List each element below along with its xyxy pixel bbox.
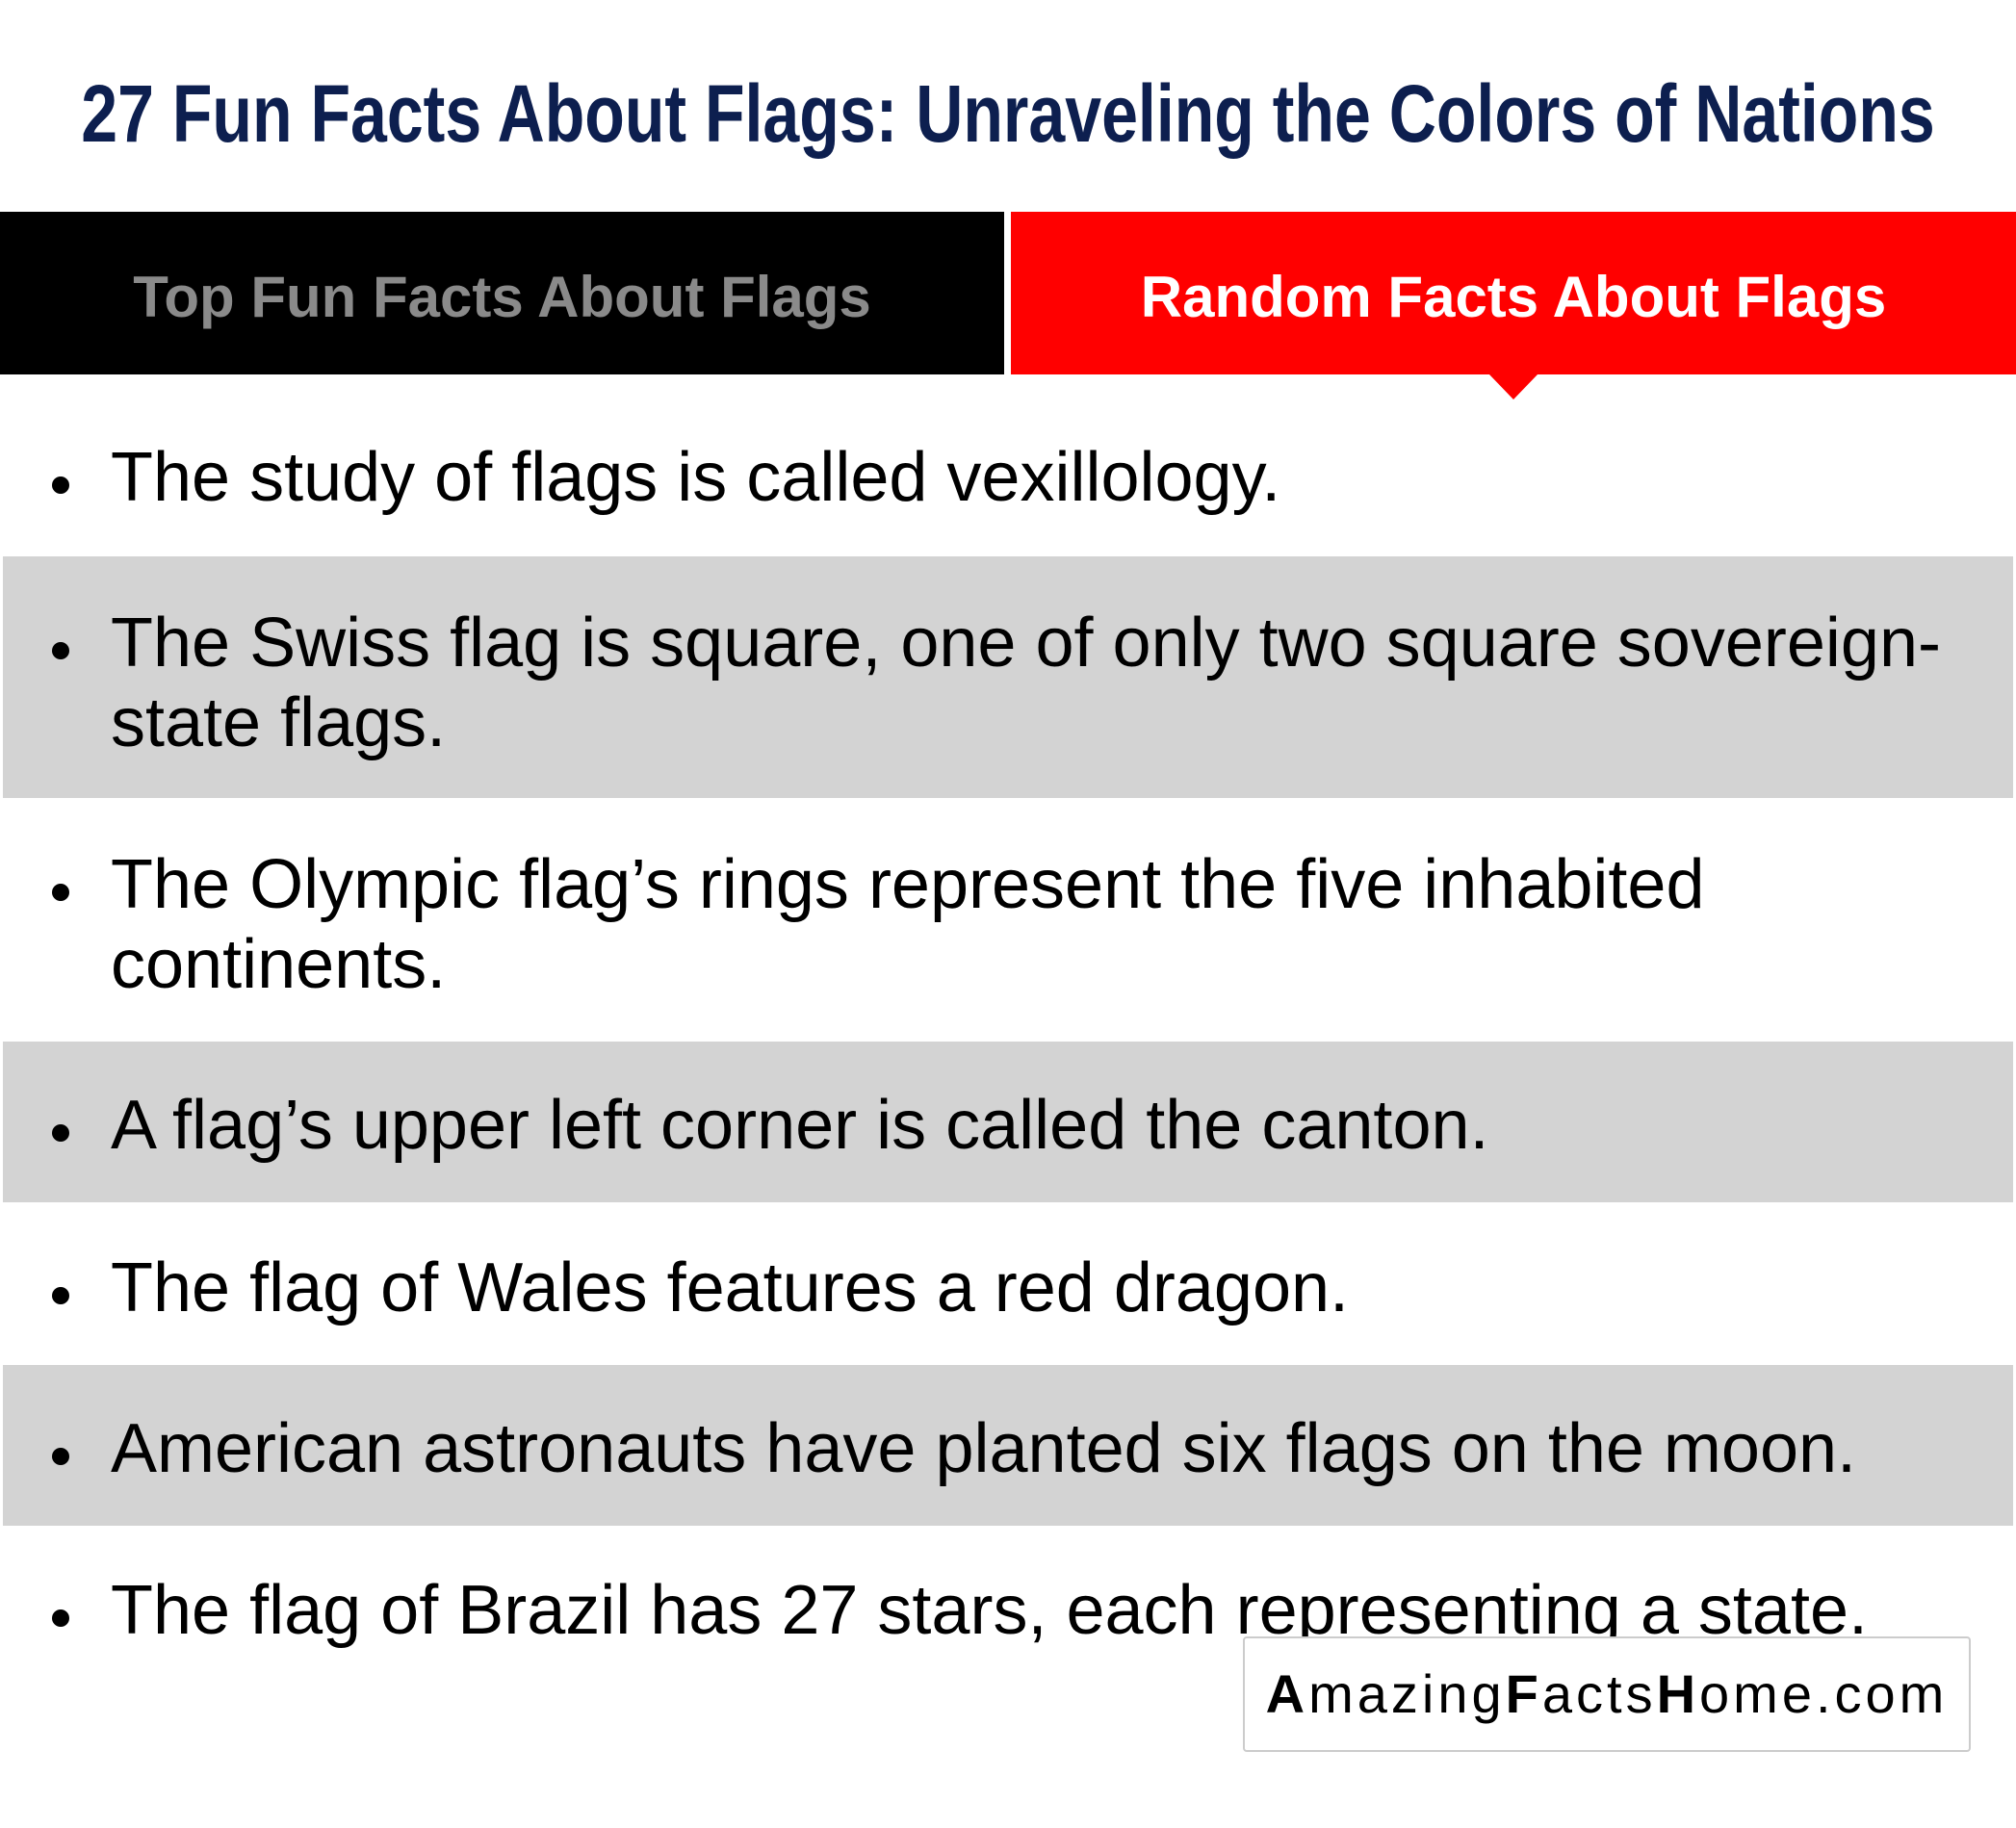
tab: top fun facts: Top Fun Facts About Flags: [133, 265, 871, 329]
fact 2: The Swiss flag is square, one of only two square sovereign-state flags.: [111, 605, 1941, 761]
fact 5: The flag of Wales features a red dragon.: [111, 1249, 1349, 1326]
tab: random facts: [1011, 212, 2016, 374]
fact 4: [3, 1042, 2013, 1202]
watermark box: [1243, 1636, 1971, 1752]
tab: top fun facts: [0, 212, 1004, 374]
fact 1: The study of flags is called vexillology.: [111, 439, 1280, 516]
tab: random facts: Random Facts About Flags: [1141, 265, 1886, 329]
fact 6: American astronauts have planted six flags on the moon.: [111, 1410, 1856, 1487]
title: 27 Fun Facts About Flags: Unraveling the Colors of Nations: [81, 68, 1935, 159]
watermark box: AmazingFactsHome.com: [1266, 1663, 1948, 1724]
fact 2: [3, 556, 2013, 798]
fact 4: A flag’s upper left corner is called the canton.: [111, 1087, 1489, 1164]
fact 6: [3, 1365, 2013, 1526]
fact 7: The flag of Brazil has 27 stars, each representing a state.: [111, 1572, 1868, 1649]
tab pointer arrow: [1488, 373, 1538, 399]
fact 3: The Olympic flag’s rings represent the five inhabited continents.: [111, 846, 1705, 1003]
